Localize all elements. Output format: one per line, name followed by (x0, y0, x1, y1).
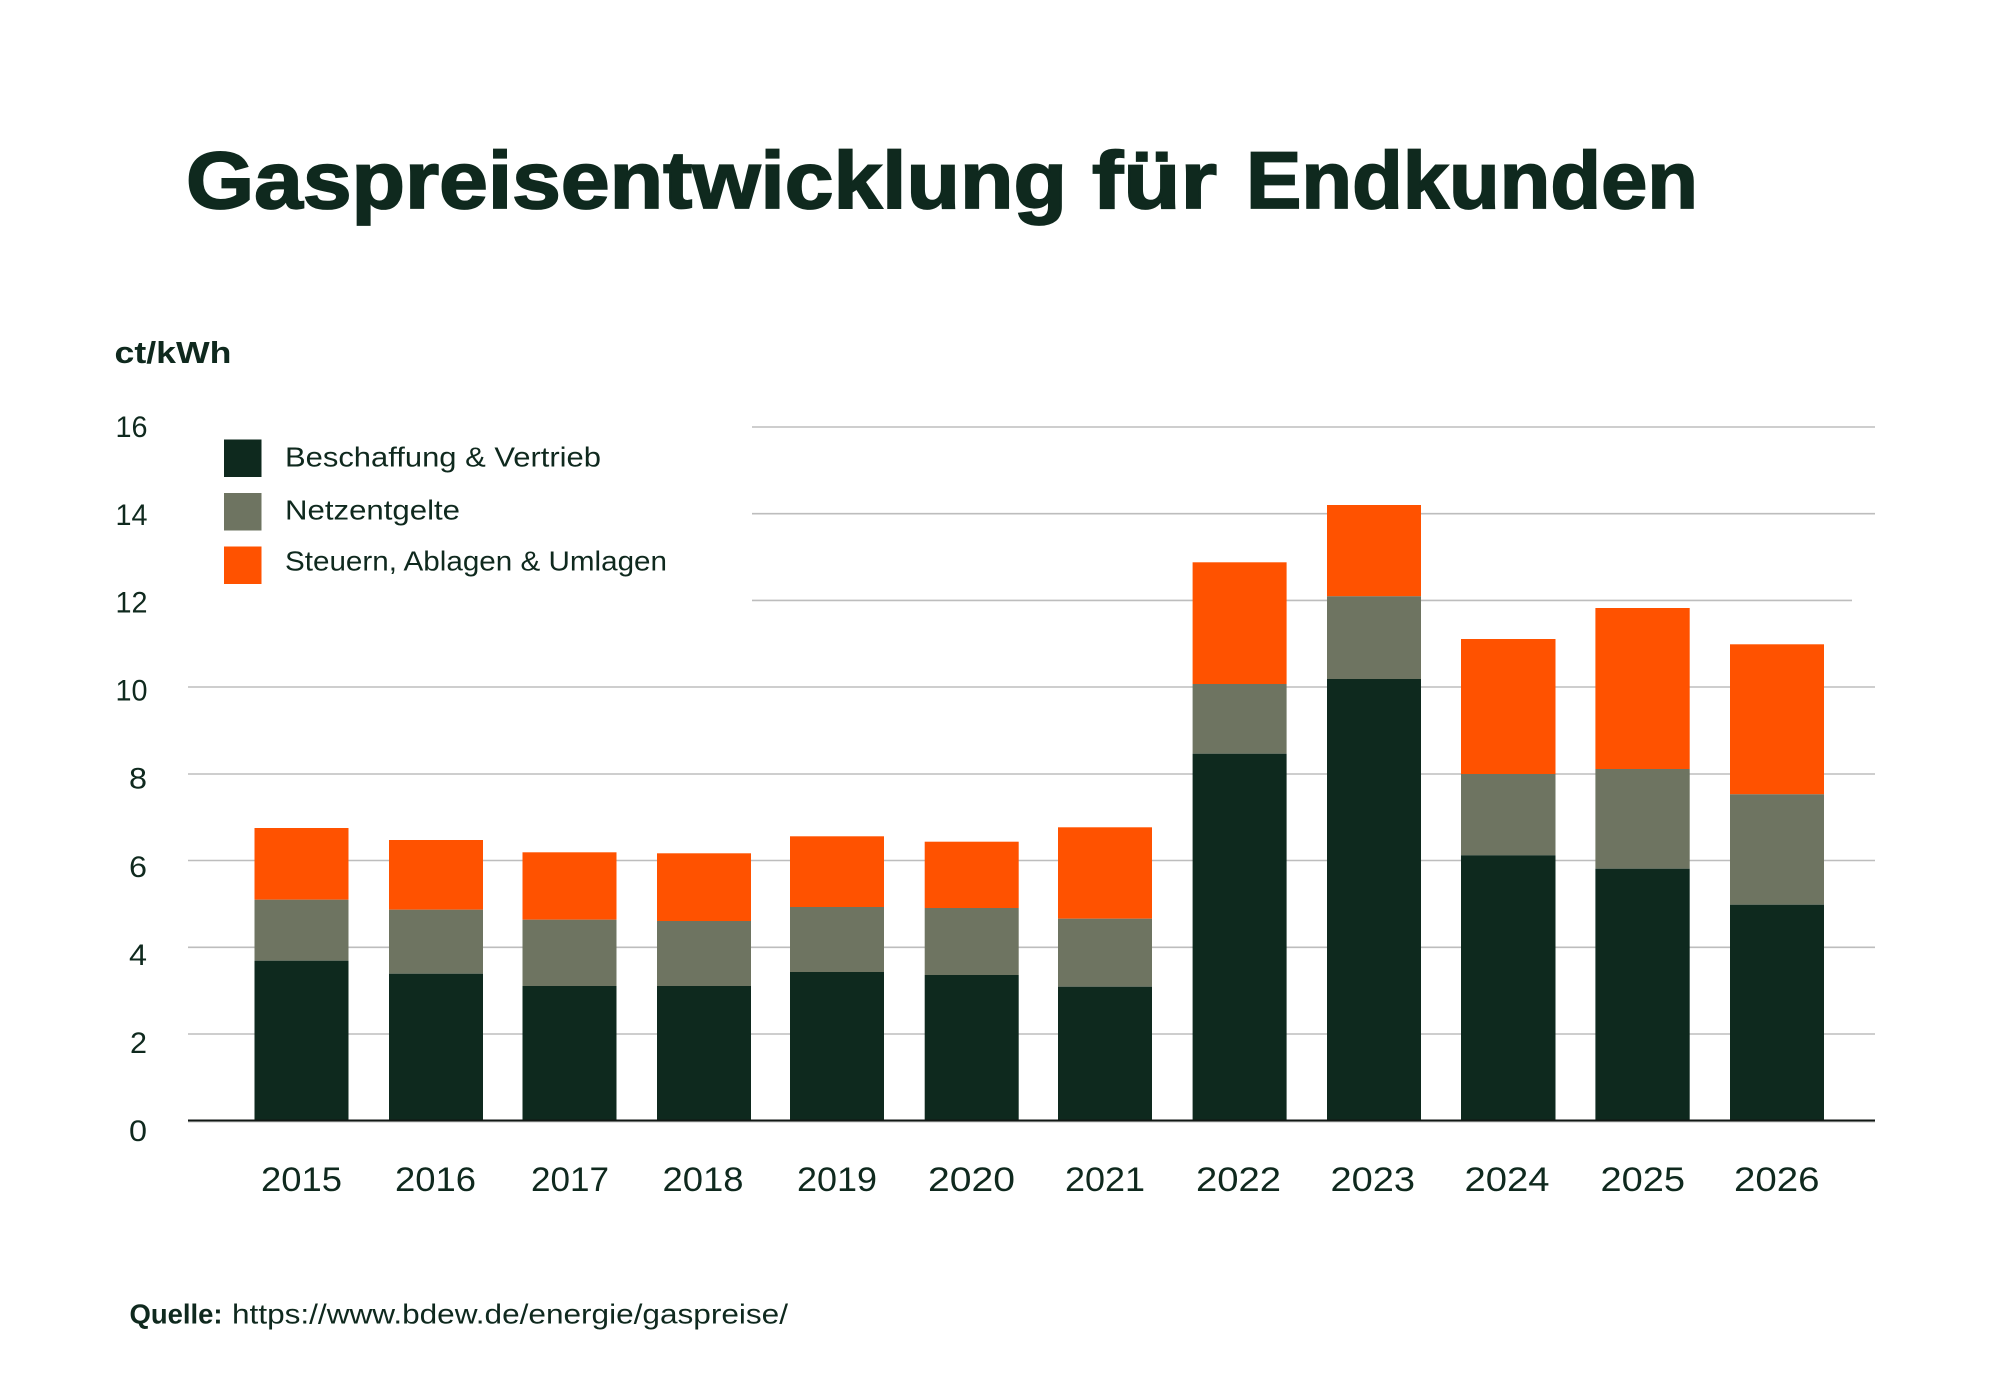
legend item: Netzentgelte (224, 493, 460, 530)
x-axis year labels: 2023 (1330, 1161, 1415, 1199)
title: für (1092, 136, 1217, 226)
bar 2025 (1595, 608, 1690, 1120)
x-axis year labels: 2025 (1600, 1161, 1685, 1199)
y-axis tick labels: 14 (116, 499, 148, 532)
bar 2016 (389, 840, 483, 1120)
y-axis tick labels: 2 (130, 1027, 147, 1060)
legend item: Steuern, Ablagen & Umlagen (224, 546, 667, 584)
bar 2018 (657, 853, 751, 1120)
bar 2026 (1730, 644, 1824, 1120)
x-axis year labels: 2017 (531, 1161, 609, 1199)
bar 2019 (790, 836, 884, 1120)
y-axis tick labels (116, 411, 148, 1148)
title (186, 136, 1698, 226)
title: Endkunden (1246, 136, 1698, 226)
x-axis year labels: 2021 (1065, 1161, 1145, 1199)
x-axis year labels: 2015 (261, 1161, 342, 1199)
y-axis tick labels: 16 (116, 411, 148, 444)
legend item: Beschaffung & Vertrieb (224, 440, 601, 477)
x-axis year labels: 2026 (1734, 1161, 1820, 1199)
bar 2023 (1327, 505, 1421, 1120)
x-axis year labels: 2016 (395, 1161, 476, 1199)
x-axis baseline (188, 1120, 1875, 1122)
x-axis year labels: 2018 (662, 1161, 744, 1199)
legend item: Netzentgelte: Netzentgelte (285, 494, 460, 525)
title: Gaspreisentwicklung (186, 136, 1067, 226)
y-axis tick labels: 10 (116, 674, 148, 708)
y-axis tick labels: 0 (129, 1115, 147, 1148)
legend (224, 440, 667, 584)
source line: Quelle: (130, 1298, 222, 1329)
x-axis year labels: 2024 (1464, 1161, 1550, 1199)
legend item: Steuern, Ablagen & Umlagen: Steuern, Ablagen & Umlagen (285, 546, 667, 577)
x-axis year labels: 2022 (1196, 1161, 1281, 1199)
bar 2021 (1058, 827, 1152, 1120)
source line: https://www.bdew.de/energie/gaspreise/ (232, 1298, 788, 1329)
legend item: Beschaffung & Vertrieb: Beschaffung & Vertrieb (285, 442, 601, 473)
bar 2017 (522, 852, 616, 1120)
y-axis tick labels: 12 (116, 586, 148, 620)
bar 2024 (1461, 639, 1556, 1120)
y-axis tick labels: 8 (129, 762, 147, 796)
bar 2020 (925, 842, 1019, 1120)
bar 2015 (254, 828, 348, 1120)
y-axis tick labels: 6 (129, 851, 147, 884)
stacked bar chart (254, 505, 1824, 1120)
x-axis year labels (261, 1161, 1820, 1199)
x-axis year labels: 2020 (928, 1161, 1015, 1199)
y-axis unit label: ct/kWh (114, 335, 232, 370)
bar 2022 (1193, 562, 1287, 1120)
x-axis year labels: 2019 (797, 1161, 877, 1199)
y-axis tick labels: 4 (129, 939, 147, 972)
